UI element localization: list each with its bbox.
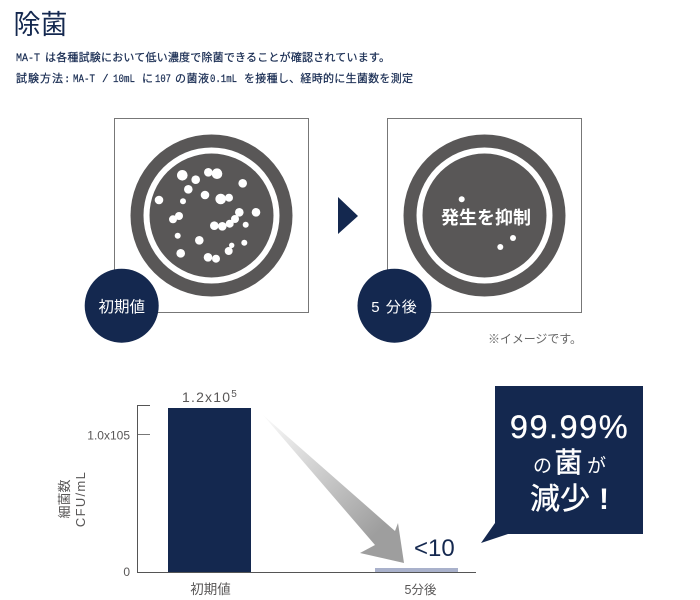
description text: の菌液: [175, 72, 209, 86]
description text: を接種し、経時的に生菌数を測定: [244, 71, 413, 86]
description text: MA-T: [73, 74, 95, 86]
icon: petri dish with few colonies: [404, 134, 566, 296]
description text: は各種試験において低い濃度で除菌できることが確認されています。: [45, 50, 390, 65]
y axis title: [57, 471, 88, 527]
bar: after 5 minutes: [375, 568, 458, 572]
y axis tick labels: 0: [123, 565, 130, 579]
description text: :: [64, 74, 70, 86]
callout: 99.99% reduction: [481, 386, 643, 543]
callout: 99.99% reduction: 菌: [554, 447, 583, 478]
panel: initial value dish: [85, 118, 308, 343]
description text: 0.1mL: [210, 74, 237, 86]
x axis labels: 初期値: [190, 582, 231, 597]
y axis title: CFU/mL: [73, 471, 88, 527]
value label: after 5 minutes: <10: [414, 535, 455, 562]
callout: 99.99% reduction: 99.99%: [510, 409, 629, 445]
bar: initial value: [168, 408, 251, 572]
icon: petri dish with many colonies: [130, 134, 292, 296]
callout: 99.99% reduction: !: [599, 483, 609, 516]
description text: 試験方法: [16, 71, 63, 86]
icon: petri dish with few colonies: 発生を抑制: [441, 207, 531, 228]
y axis: [138, 406, 476, 572]
note: ※イメージです。: [488, 332, 582, 346]
arrow: decrease: [263, 415, 404, 563]
badge: after 5 minutes: [358, 269, 432, 343]
callout: 99.99% reduction: の: [533, 456, 552, 477]
panel: after 5 minutes dish: [358, 118, 582, 343]
value label: initial: 5: [231, 389, 238, 400]
description text: MA-T: [16, 53, 40, 65]
bar chart: 5分後: [405, 583, 437, 597]
callout: 99.99% reduction: 減少: [530, 483, 590, 516]
callout: 99.99% reduction: が: [587, 455, 606, 477]
arrow: next step triangle: [338, 197, 358, 234]
description text: [16, 50, 413, 86]
y axis title: 細菌数: [57, 479, 72, 519]
y axis tick labels: 1.0x105: [87, 428, 130, 442]
description text: /: [102, 74, 109, 86]
value label: initial: 1.2x10: [182, 389, 231, 405]
bar chart: [57, 389, 476, 597]
y axis tick labels: [87, 428, 130, 579]
badge: initial value: 初期値: [98, 298, 145, 316]
title: 除菌: [14, 10, 68, 40]
description text: 10mL: [113, 74, 135, 86]
badge: initial value: [85, 269, 159, 343]
badge: after 5 minutes: 5 分後: [371, 299, 418, 316]
description text: に: [142, 73, 153, 86]
description text: 107: [155, 74, 171, 86]
